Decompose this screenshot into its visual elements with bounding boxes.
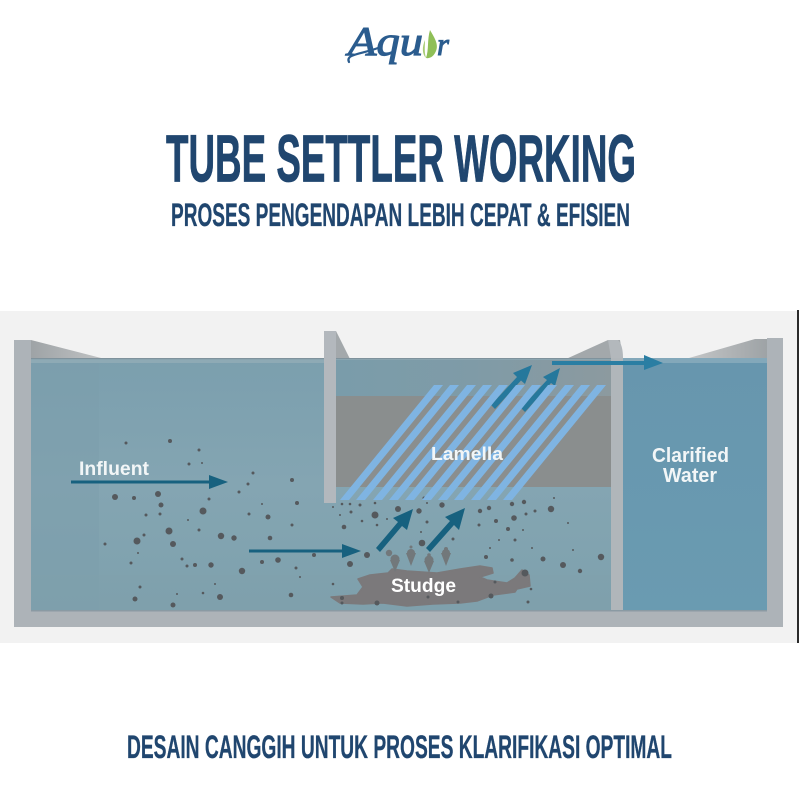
arrow: exit flow left [491,365,532,409]
arrow: influent flow [71,475,228,489]
settling drops falling to sludge [386,546,451,573]
arrow: upflow left [376,509,413,552]
logo: Aquair wordmark [345,18,450,64]
panel: tube settler diagram [0,310,799,643]
label: Clarified Water: Clarified [652,445,729,467]
arrow: exit flow right [521,368,560,412]
baffle wall [324,331,336,503]
label: Sludge: Studge [391,576,456,597]
icon: green leaf flame [423,30,437,58]
sludge pile [331,566,530,606]
sediment particles [104,439,604,608]
label: Lamella: Lamella [431,444,504,464]
lamella plates [340,385,606,500]
label: Influent: Influent [79,458,149,480]
logo: Aquair wordmark: r [437,26,450,62]
lamella shaded zone [336,396,611,487]
tank: left and center water basin [31,331,623,611]
logo: Aquair wordmark: Aqu [345,18,423,64]
label: Clarified Water: Water [663,465,717,487]
tank: clarified water basin [623,339,767,611]
diagram background [0,311,797,643]
label: Clarified Water [652,445,729,487]
arrow: upflow right [426,508,465,552]
arrow: flow toward lamella [249,544,361,558]
arrow: clarified outflow [552,355,663,370]
tank walls [14,338,783,627]
